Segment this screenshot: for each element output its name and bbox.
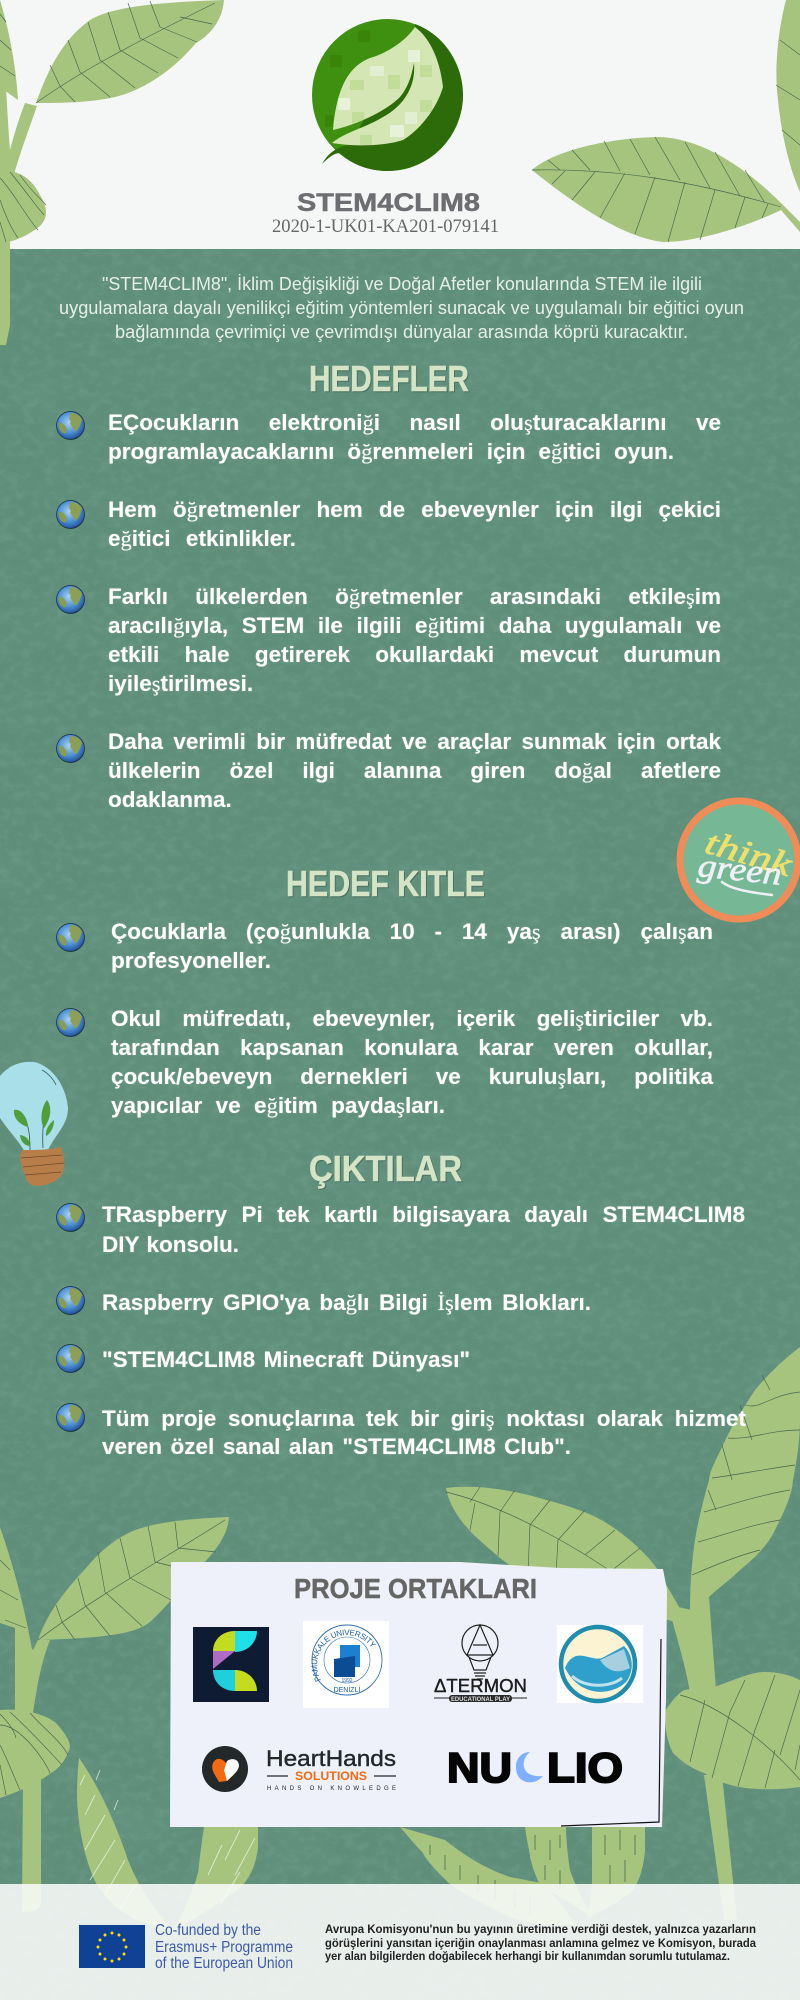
plant: bottom left: [0, 1517, 258, 1932]
logo: Pamukkale University: PAMUKKALE UNIVERSITY: [311, 1630, 376, 1682]
output 4: [56, 1403, 746, 1459]
output 3: "STEM4CLIM8 Minecraft Dünyası": [102, 1347, 470, 1372]
logo: HeartHands: [202, 1746, 396, 1792]
badge: think green: green: [696, 848, 783, 893]
logo: Atermon: EDUCATIONAL PLAY: [451, 1697, 510, 1703]
disclaimer text: [325, 1924, 757, 1963]
logo: K: [193, 1627, 269, 1702]
disclaimer text: yer alan bilgilerden doğabilecek herhangi bir kullanımdan sorumlu tutulamaz.: [325, 1951, 730, 1963]
badge: think green: think: [701, 824, 797, 884]
project logo: [312, 19, 463, 171]
footer content: [79, 1922, 757, 1972]
logo: Pamukkale University: 1992: [341, 1678, 353, 1684]
intro text: [59, 274, 744, 342]
objective 3: Farklı ülkelerden öğretmenler arasındaki etkileşim: [108, 584, 721, 609]
disclaimer text: görüşlerini yansıtan içeriğin onaylanması anlamına gelmez ve Komisyon, burada: [325, 1938, 757, 1950]
audience 1: [56, 919, 713, 973]
output 1: DIY konsolu.: [102, 1232, 239, 1257]
output 2: Raspberry GPIO'ya bağlı Bilgi İşlem Blokları.: [102, 1290, 591, 1315]
erasmus co-funding text: Co-funded by the: [155, 1922, 261, 1939]
logo: HeartHands: SOLUTIONS: [295, 1769, 367, 1783]
intro text: uygulamalara dayalı yenilikçi eğitim yöntemleri sunacak ve uygulamalı bir eğitici oyun: [59, 298, 744, 318]
header white band: [0, 0, 800, 249]
heading: hedefler: HEDEFLER: [309, 358, 469, 399]
logo: Pamukkale University: DENİZLİ: [334, 1685, 360, 1694]
plant: top left: [0, 0, 224, 345]
panel: project partners: [170, 1562, 667, 1827]
objective 4: odaklanma.: [108, 787, 232, 812]
objective 3: [56, 584, 721, 696]
objective 3: etkili hale getirerek okullardaki mevcut durumun: [108, 642, 721, 667]
badge: think green: [676, 798, 800, 922]
objective 2: Hem öğretmenler hem de ebeveynler için ilgi çekici: [108, 497, 721, 522]
logo: Nuclio: LIO: [547, 1744, 623, 1791]
erasmus co-funding text: of the European Union: [155, 1955, 293, 1972]
objective 1: EÇocukların elektroniği nasıl oluşturacaklarını ve: [108, 410, 721, 435]
audience 2: Okul müfredatı, ebeveynler, içerik geliştiriciler vb.: [111, 1006, 713, 1031]
logo: school association: [557, 1625, 643, 1703]
logo: HeartHands: HANDS ON KNOWLEDGE: [267, 1786, 396, 1792]
logo: Atermon: ΔTERMON: [434, 1676, 527, 1696]
logo: HeartHands: HeartHands: [266, 1746, 396, 1771]
plant: bottom right: [400, 1347, 800, 1925]
logo: Nuclio: [447, 1744, 623, 1791]
objective 1: programlayacaklarını öğrenmeleri için eğitici oyun.: [108, 439, 674, 464]
project name: STEM4CLIM8: [297, 189, 480, 217]
audience 2: [56, 1006, 714, 1118]
objective 4: ülkelerin özel ilgi alanına giren doğal afetlere: [108, 758, 721, 783]
objective 1: [56, 410, 721, 464]
output 4: veren özel sanal alan "STEM4CLIM8 Club".: [102, 1434, 571, 1459]
erasmus co-funding text: Erasmus+ Programme: [155, 1939, 293, 1956]
output 4: Tüm proje sonuçlarına tek bir giriş noktası olarak hizmet: [102, 1406, 746, 1431]
audience 1: Çocuklarla (çoğunlukla 10 - 14 yaş arası) çalışan: [111, 919, 713, 944]
logo: Pamukkale University: [303, 1621, 389, 1708]
logo: Nuclio: NU: [447, 1744, 512, 1791]
erasmus co-funding text: [155, 1922, 293, 1972]
audience 2: yapıcılar ve eğitim paydaşları.: [111, 1093, 445, 1118]
audience 2: tarafından kapsanan konulara karar veren okullar,: [111, 1035, 713, 1060]
objective 3: iyileştirilmesi.: [108, 671, 253, 696]
icon: light bulb with plant: [0, 1062, 68, 1186]
objective 4: [56, 729, 722, 812]
disclaimer text: Avrupa Komisyonu'nun bu yayının üretimine verdiği destek, yalnızca yazarların: [325, 1924, 756, 1936]
output 1: [56, 1202, 745, 1257]
audience 1: profesyoneller.: [111, 948, 271, 973]
heading: proje ortaklari: PROJE ORTAKLARI: [294, 1573, 537, 1604]
project code: 2020-1-UK01-KA201-079141: [272, 216, 499, 237]
objective 4: Daha verimli bir müfredat ve araçlar sunmak için ortak: [108, 729, 721, 754]
logo: Atermon: [434, 1625, 527, 1703]
objective 2: [56, 497, 721, 551]
output 1: TRaspberry Pi tek kartlı bilgisayara dayalı STEM4CLIM8: [102, 1202, 745, 1227]
icon: EU flag: [79, 1925, 145, 1968]
objective 2: eğitici etkinlikler.: [108, 526, 296, 551]
objective 3: aracılığıyla, STEM ile ilgili eğitimi daha uygulamalı ve: [108, 613, 721, 638]
footer band: [0, 1884, 800, 2000]
intro text: "STEM4CLIM8", İklim Değişikliği ve Doğal Afetler konularında STEM ile ilgili: [102, 274, 702, 294]
heading: ciktilar: ÇIKTILAR: [309, 1148, 462, 1189]
heading: hedef kitle: HEDEF KITLE: [286, 863, 485, 904]
audience 2: çocuk/ebeveyn dernekleri ve kuruluşları, politika: [111, 1064, 713, 1089]
plant: top right: [532, 0, 800, 242]
project name: [272, 189, 499, 237]
intro text: bağlamında çevrimiçi ve çevrimdışı dünyalar arasında köprü kuracaktır.: [115, 322, 688, 342]
